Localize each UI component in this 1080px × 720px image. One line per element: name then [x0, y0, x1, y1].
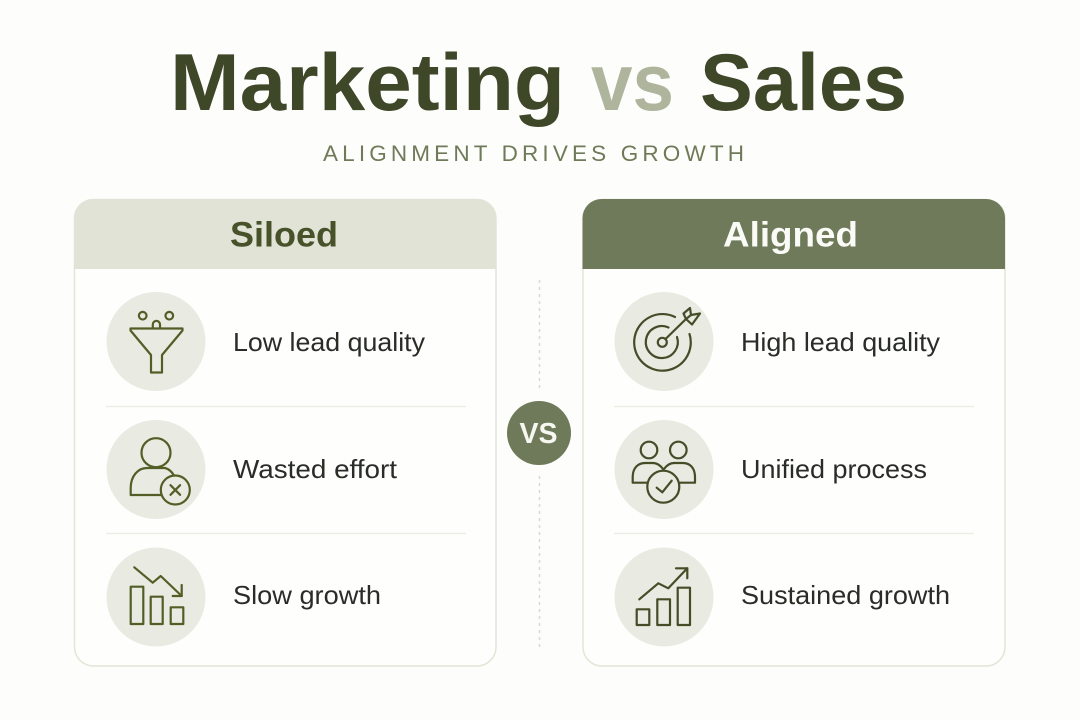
- title: vs: [591, 38, 674, 128]
- subtitle: ALIGNMENT DRIVES GROWTH: [323, 141, 744, 166]
- row: low lead quality: Low lead quality: [233, 327, 425, 357]
- row: slow growth: Slow growth: [233, 580, 381, 610]
- row: slow growth: [106, 548, 381, 646]
- title: Marketing: [170, 38, 565, 128]
- row: sustained growth: [614, 548, 950, 646]
- icon: declining bars: [131, 567, 183, 624]
- row: wasted effort: [106, 420, 398, 519]
- icon: rising bars: [637, 568, 690, 625]
- row: high lead quality: [614, 292, 940, 391]
- vs divider: [507, 280, 571, 648]
- panel: aligned: [582, 199, 1005, 666]
- title: Sales: [700, 38, 907, 128]
- siloed header: Siloed: [230, 216, 338, 254]
- row: unified process: Unified process: [741, 454, 927, 484]
- aligned header: Aligned: [723, 216, 858, 254]
- row: low lead quality: [106, 292, 425, 391]
- aligned header: [582, 199, 1005, 269]
- panel: siloed: [74, 199, 496, 666]
- row: wasted effort: Wasted effort: [233, 454, 398, 484]
- icon: team with check: [633, 442, 695, 503]
- title: [170, 38, 907, 128]
- row: unified process: [614, 420, 927, 519]
- siloed header: [74, 199, 496, 269]
- icon: person with x: [131, 438, 190, 504]
- vs divider: VS: [520, 418, 558, 450]
- icon: target with arrow: [634, 308, 700, 371]
- row: sustained growth: Sustained growth: [741, 580, 950, 610]
- icon: funnel: [130, 312, 182, 372]
- row: high lead quality: High lead quality: [741, 327, 940, 357]
